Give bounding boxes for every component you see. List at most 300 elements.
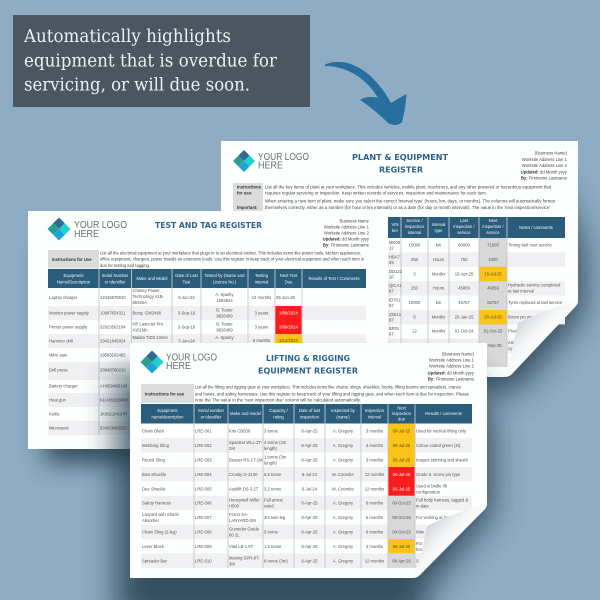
table: lifting register: 08-Jul-25 (393, 544, 411, 549)
table: test register: Microwave (49, 425, 70, 430)
table: plant register: 60000 (458, 243, 470, 248)
table: test register: A. Sparky (215, 335, 234, 340)
table: lifting register: Results / comments (425, 411, 462, 416)
table: lifting register: Used for vertical lifting only (416, 429, 467, 434)
table: test register: Make and Model (137, 276, 168, 281)
table: test register: Printer power supply (49, 325, 88, 330)
table: lifting register: 6 months (366, 501, 383, 506)
instructions: plant register: When entering a new item of plant, make sure you select the correct 'interval type' (hours, km, days, or months). The columns will automatically format (265, 199, 556, 204)
instructions: test register (48, 250, 364, 268)
table: test register: 3/12/2024 (279, 338, 298, 343)
table: test register: A. Sparky (215, 292, 234, 297)
table: lifting register: 08-Jul-25 (393, 429, 411, 434)
table: lifting register: Lever Block (142, 544, 165, 549)
table: plant register: DD123 (389, 269, 403, 274)
table: plant register: 67 (389, 303, 394, 308)
table: lifting register: (name) (336, 414, 350, 420)
table: plant register: Notes / comments (519, 225, 553, 230)
address block: lifting register: Worksite Address Line 1 (429, 358, 475, 363)
table: lifting register: A. Gregory (333, 501, 354, 506)
table: plant register: type (435, 228, 443, 233)
table: lifting register: 80 2L (229, 532, 240, 538)
table: lifting register: 8-Apr-25 (301, 501, 318, 506)
table: lifting register: LRE-009 (195, 544, 212, 549)
logo: lifting register (140, 350, 217, 374)
instructions: test register: Instructions for Use (52, 257, 92, 262)
table: lifting register: A. Gregory (333, 544, 354, 549)
table: lifting register: Beaver RS-1T-1M (229, 458, 263, 463)
instructions: plant register (233, 183, 556, 211)
table: lifting register: 8-Apr-25 (301, 429, 318, 434)
table: lifting register: Austlift DS-3.2T (229, 486, 259, 491)
table: test register (48, 269, 366, 435)
callout banner: servicing, or will due soon. (24, 76, 250, 96)
table: plant register: km (436, 300, 442, 305)
table: lifting register: Ferno SA- (229, 512, 249, 517)
table: lifting register: Capacity / (269, 408, 289, 413)
table: test register: 3 years (255, 311, 268, 316)
address block: test register: Updated: dd Month yyyy (323, 237, 370, 242)
table: lifting register: Chain Block (142, 429, 165, 434)
table: plant register: inspection / (453, 224, 475, 229)
table: lifting register: H500 (229, 504, 240, 509)
table: lifting register: 08-Oct-25 (392, 501, 411, 506)
table: plant register: Boom pin wear monitored (508, 315, 556, 320)
table: lifting register: Make and model (230, 411, 261, 416)
table: plant register: 750 (460, 257, 468, 262)
table: lifting register: Absorber (142, 518, 160, 523)
table: lifting register: Serial number (198, 408, 225, 413)
table: plant register: Press (508, 329, 519, 334)
panel: plant and equipment register (221, 141, 578, 377)
table: plant register: Months (432, 315, 445, 320)
logo: test register: HERE (74, 229, 99, 240)
table: lifting register: LRE-010 (195, 558, 212, 563)
table: lifting register: 8 tonne (3m) (264, 558, 288, 563)
logo: plant register (233, 150, 309, 172)
table: lifting register: Witn (416, 529, 425, 534)
table: lifting register: LRE-002 (195, 443, 212, 448)
table: test register: 93402M83320 (100, 425, 127, 430)
table: lifting register: 8-Apr-25 (301, 443, 318, 448)
table: lifting register: Webbing Sling (142, 443, 170, 448)
instructions: test register: office equipment, chargers, power boards an extension leads. Use this register to keep track of your electrical equipment and when each item is (100, 256, 364, 261)
table: lifting register: 8-Apr-25 (301, 458, 318, 463)
table: plant register: 12 (412, 329, 417, 334)
table: plant register: km (436, 243, 442, 248)
table: lifting register: LRE-006 (195, 501, 212, 506)
table: lifting register: Colour coded green (2t) (416, 443, 461, 448)
table: lifting register: 06-Jul-25 (393, 472, 411, 477)
table: lifting register: 2 tonne (2m (264, 440, 287, 445)
table: lifting register: 6.5 tonne (264, 472, 282, 477)
table: test register: B. Tester (216, 308, 233, 312)
table: plant register: service (486, 230, 500, 235)
table: test register: 6 months (253, 338, 270, 343)
table: lifting register: M. Coombe (332, 486, 354, 491)
table: lifting register: For b (416, 541, 426, 546)
table: plant register: Interval (432, 222, 445, 227)
panel: lifting and rigging register (130, 343, 487, 578)
table: lifting register: 6-Jul-24 (302, 472, 318, 477)
table: lifting register: 3M (229, 562, 235, 566)
table: lifting register: inspection (392, 411, 412, 416)
table: lifting register: hook (416, 547, 426, 552)
table: test register: Next Test (280, 273, 298, 278)
table: lifting register: 2M (229, 446, 235, 451)
table: plant register: Service / (406, 218, 423, 223)
table: test register: Battery charger (49, 384, 78, 389)
table: lifting register: 8-Apr-25 (301, 529, 318, 534)
panel: test and tag register (28, 211, 388, 449)
table: lifting register: Next (397, 406, 407, 410)
address block: plant register (521, 151, 568, 181)
table: plant register: 67 (389, 288, 394, 294)
table: plant register: ID701 (389, 298, 401, 302)
table: lifting register: 3 months (366, 443, 383, 448)
address block: lifting register: By: Firstname Lastname (428, 377, 475, 382)
instructions: lifting register: List all the lifting and rigging gear at your workplace. This includes items like chains, slings, shackles, hooks, lifting beams and spreaders, cranes (195, 385, 461, 390)
table: test register: 10987654321 (100, 311, 126, 316)
table: lifting register: A. Gregory (333, 529, 354, 534)
table: plant register: 01-Oct-25 (484, 329, 503, 334)
address block: test register: Business Name (340, 219, 370, 224)
table: lifting register: 08-Oct-25 (392, 515, 411, 520)
table: plant register: 45757 (458, 300, 470, 305)
table: plant register: Next (489, 218, 498, 223)
instructions: lifting register: note the The value in the 'next inspection due' column will be calculated automatically. (195, 398, 361, 403)
table: test register: 12 months (252, 295, 271, 300)
table: plant register: 6 (413, 315, 416, 320)
table: test register: 29451845024 (100, 339, 126, 344)
table: plant register: 12 (389, 246, 394, 250)
table: test register: Due (285, 280, 293, 284)
address block: lifting register: Worksite Address Line 2 (429, 364, 475, 369)
table: lifting register: Grade 6, screw pin type (416, 472, 461, 477)
table: test register: 32923502184 (100, 325, 126, 330)
table: test register: Monitor power supply (49, 311, 90, 316)
table: test register: Hammer drill (49, 339, 73, 344)
logo: lifting register: YOUR LOGO (166, 353, 217, 364)
table: plant register: 67 (389, 332, 394, 336)
table: lifting register: Gunnebo Grade (229, 526, 260, 532)
table: lifting register: Inspect stitching and sheath (416, 458, 469, 463)
table: plant register: 87 (389, 318, 394, 322)
table: lifting register: LRE-003 (195, 458, 212, 463)
title: test register: TEST AND TAG REGISTER (155, 220, 263, 230)
table: plant register: 3 (413, 272, 416, 277)
table: lifting register: LRE-001 (195, 429, 212, 434)
table: test register: Date of Last (175, 273, 199, 278)
logo: plant register: YOUR LOGO (258, 152, 309, 163)
instructions: plant register: for use: (237, 191, 252, 196)
table: test register: 4101fdn (132, 328, 148, 332)
table: test register: 3 years (255, 325, 268, 330)
table: plant register: Annu (508, 340, 518, 345)
title: lifting register: LIFTING & RIGGING (266, 353, 350, 363)
table: test register: Testing (255, 273, 269, 278)
table: lifting register: 8-Apr-25 (301, 544, 318, 549)
table: lifting register: 12 months (365, 472, 384, 477)
table: lifting register: LRE-007 (195, 515, 212, 520)
table: lifting register: Safety Harness (142, 501, 171, 506)
callout banner (13, 15, 310, 107)
table: lifting register: Chain Sling (2-leg) (142, 529, 177, 534)
title: plant register (352, 152, 448, 175)
table: plant register: Hours (433, 286, 444, 291)
table: lifting register: interval (368, 414, 381, 420)
table: lifting register: Fall arrest (264, 498, 283, 503)
table: test register: Mitre saw (49, 353, 68, 358)
address block: plant register: Worksite Address Line 2 (522, 163, 568, 168)
table: test register: 28848760210 (100, 368, 126, 373)
table: lifting register: A. Gregory (333, 558, 354, 563)
callout banner: Automatically highlights (23, 27, 231, 47)
address block: test register: Worksite Address Line 2 (324, 231, 370, 236)
table: lifting register: A. Gregory (333, 429, 354, 434)
instructions: plant register: requires regular servicing or inspection. Keep written records of services, inspection and maintenance for each item. (265, 191, 487, 196)
title: lifting register: EQUIPMENT REGISTER (258, 366, 359, 376)
table: lifting register: 08-Oct-25 (392, 529, 411, 534)
table: plant register: 29 (389, 260, 394, 265)
table: lifting register: Date of last (299, 408, 321, 413)
table: plant register: 15000 (409, 243, 421, 248)
address block: plant register: By: Firstname Lastname (521, 176, 568, 181)
table: lifting register: Spreader Bar (142, 558, 168, 563)
table: lifting register: Used in bridle lift (416, 484, 448, 488)
table: lifting register: 3 tonne (264, 429, 279, 434)
address block: plant register: Worksite Address Line 1 (522, 157, 568, 162)
table: lifting register: or identifier (201, 414, 222, 420)
table: plant register: 1000 (488, 257, 498, 262)
table: lifting register: 8-Apr-25 (301, 515, 318, 520)
table: test register: 5-Jun-24 (178, 295, 195, 300)
table: test register: Makita TID3 13mm (132, 335, 168, 340)
table: plant register: 45809 (458, 286, 470, 291)
table: test register: Equipment (63, 273, 84, 278)
table: plant register: 3-Sep-25 (484, 343, 502, 348)
table: lifting register: rated (264, 504, 274, 509)
table: plant register: Months (432, 272, 445, 277)
table: lifting register: in-date (416, 504, 429, 509)
logo: lifting register: HERE (166, 361, 191, 372)
table: lifting register: For working at heights (416, 515, 457, 520)
table: test register: or Identifier (105, 280, 126, 284)
table: lifting register: SpanSet WLL-2T- (229, 440, 263, 445)
table: lifting register: Crosby G-2130 (229, 472, 258, 477)
table: test register: 3/09/2024 (279, 311, 298, 316)
table: lifting register: 5 tonne (264, 529, 279, 534)
table: lifting register: A. Gregory (333, 443, 354, 448)
table: plant register: interval (408, 230, 421, 235)
table: lifting register: 3 months (366, 544, 383, 549)
table: lifting register: Equipment (157, 408, 178, 413)
table: test register: Laptop charger (49, 295, 78, 300)
table: lifting register: name/description (152, 414, 184, 420)
instructions: test register: List all the electrical equipment at your workplace that plugs in to an electrical socket. This includes items like power tools, kitchen appliances, (100, 250, 361, 255)
table: test register: Licence No.) (213, 280, 237, 284)
table: plant register: Hydraulic service completed (508, 283, 561, 288)
table: plant register: 01-Oct-24 (455, 329, 474, 334)
table: plant register: inspection (405, 224, 425, 229)
table: lifting register: Dee Shackle (142, 486, 166, 491)
table: plant register: HBA7 (389, 254, 401, 260)
table: test register: HP LaserJet Pro (132, 322, 164, 326)
table: lifting register: rating (273, 414, 284, 420)
table: test register: B. Tester (216, 322, 233, 326)
table: plant register: cycle (508, 346, 518, 351)
instructions: lifting register (141, 384, 470, 403)
instructions: plant register: Important: (237, 205, 258, 210)
table: plant register: 250 (411, 286, 419, 291)
table: lifting register: inspection (300, 414, 320, 420)
table: test register: 9826489 (216, 328, 233, 332)
table: lifting register: length) (264, 446, 277, 451)
table: test register: Kettle (49, 411, 60, 416)
instructions: plant register: List all the key items of plant at your workplace. This includes vehicles, mobile plant, machinery, and any other powered or hazardous equipment that (265, 185, 552, 190)
table: test register: 85482A (132, 300, 147, 305)
table: plant register: Hours (433, 257, 444, 262)
table: test register: JK8921041HR (100, 411, 127, 416)
table: lifting register (141, 404, 472, 568)
table: lifting register: configuration (416, 490, 441, 494)
table: lifting register: 2m twin leg (264, 515, 286, 520)
table: test register: Name/Description (57, 280, 91, 284)
table: plant register: 250 (411, 257, 419, 262)
table: lifting register: A. Gregory (333, 458, 354, 463)
table: test register: Test (183, 280, 191, 284)
table: plant register: VIN (392, 222, 398, 227)
table: test register: Technology A1B- (132, 294, 165, 299)
table: test register: Benq; GW2480 (132, 311, 162, 316)
address block: lifting register: Updated: dd Month yyyy (428, 370, 475, 375)
table: test register: 9826489 (216, 314, 233, 318)
address block: plant register: (Business Name) (535, 151, 568, 156)
table: plant register: MK08 (389, 240, 401, 245)
table: lifting register: LRE-005 (195, 486, 212, 491)
logo: test register: YOUR LOGO (74, 220, 127, 231)
table: plant register: 46059 (487, 286, 499, 291)
table: test register: Chasey Power (132, 288, 160, 293)
table: lifting register: M. Coombe (332, 472, 354, 477)
table: plant register: inspection / (482, 224, 504, 229)
table: plant register: JSK11 (389, 312, 402, 317)
table: lifting register: 1 tonne (3m (264, 455, 287, 460)
table: lifting register: Self (416, 558, 424, 563)
table: plant register: QICA1 (389, 283, 402, 288)
table: test register: Serial Number (102, 273, 129, 278)
logo: plant register: HERE (258, 160, 283, 172)
title: lifting register (258, 353, 359, 376)
table: test register: 19583102482 (100, 353, 126, 358)
table: test register: 3-Sep-19 (178, 325, 196, 330)
table: lifting register: length) (264, 461, 277, 466)
table: plant register: Timing belt next service (508, 243, 553, 248)
table: plant register: 15-Jul-25 (484, 272, 502, 277)
table: lifting register: 3 months (366, 429, 383, 434)
table: lifting register: 12 months (365, 558, 384, 563)
callout banner: equipment that is overdue for (24, 52, 278, 72)
table: test register: Heat gun (49, 398, 67, 403)
table: lifting register: 06-Jul-25 (393, 486, 411, 491)
table: test register: 3-Sep-19 (178, 311, 196, 316)
table: plant register: Last (460, 218, 469, 223)
table: lifting register: Inspection (365, 408, 385, 413)
table: test register: Drill press (49, 368, 68, 373)
table: lifting register: 6 months (366, 529, 383, 534)
table: plant register: at last interval (508, 289, 534, 294)
table: plant register: 1F (389, 274, 394, 280)
address block: lifting register (428, 352, 475, 382)
table: lifting register: Bow Shackle (142, 472, 167, 477)
table: plant register: 20-Jan-25 (455, 315, 474, 320)
table: lifting register: 6-Jul-24 (302, 486, 318, 491)
table: lifting register: Vital LB-1.5T (229, 544, 254, 549)
table: lifting register: Round Sling (142, 458, 165, 463)
title: plant register: PLANT & EQUIPMENT (352, 152, 448, 162)
title: plant register: REGISTER (379, 165, 424, 175)
table: plant register: ber (392, 228, 399, 233)
table: test register: 12345678910 (100, 295, 126, 300)
address block: plant register: Updated: dd Month yyyy (521, 169, 568, 174)
instructions: plant register: themselves correctly, either as a number (for hour or km intervals) or as a date (for day or month intervals). The value in the 'next inspection/service' (265, 205, 550, 210)
address block: lifting register: (Business Name) (442, 352, 475, 357)
table: lifting register: 12 months (365, 486, 384, 491)
table: test register: 1569824 (216, 298, 233, 303)
address block: test register: By: Firstname Lastname (323, 243, 370, 248)
table: plant register: 71000 (487, 243, 499, 248)
arrow (325, 62, 406, 125)
table: test register: 05-Jun-25 (276, 295, 296, 300)
table: lifting register: due (398, 416, 406, 422)
page curl: lifting register (413, 504, 487, 578)
table: plant register: BP01 (389, 326, 400, 331)
table: lifting register: Inspected by (331, 408, 356, 413)
table: plant register: 10000 (409, 300, 421, 305)
table: test register: 7-Jun-24 (178, 339, 195, 344)
table: test register: Results of Test / Comments (308, 276, 360, 281)
table: lifting register: LRE-004 (195, 472, 212, 477)
table: lifting register: 08-Jul-25 (393, 458, 411, 463)
table: test register: KLIA09103848 (100, 398, 128, 403)
page curl: plant register (505, 301, 578, 377)
table: lifting register: 3 months (366, 458, 383, 463)
table: lifting register: 1.5 tonne (264, 544, 282, 549)
table: lifting register: Lanyard with Shock (142, 512, 179, 517)
table: lifting register: 6 months (366, 515, 383, 520)
table: lifting register: 8-Apr-25 (301, 558, 318, 563)
table: lifting register: LRE-008 (195, 529, 212, 534)
table: lifting register: Maxing SPR-8T- (229, 556, 260, 560)
instructions: test register: due for testing and tagging. (100, 263, 150, 268)
table: plant register: service (457, 230, 471, 235)
table: lifting register: Kito CB030 (229, 429, 251, 434)
table: plant register: 20-Jul-25 (484, 315, 502, 320)
table: plant register: Months (432, 329, 445, 334)
table: plant register: 15-Apr-25 (455, 272, 474, 277)
table: lifting register: 08-Apr-26 (392, 558, 411, 563)
table: test register: Tested by (Name and (205, 273, 245, 278)
table: lifting register: 08-Jul-25 (393, 443, 411, 448)
table: plant register: 55757 (487, 300, 499, 305)
logo: test register (48, 218, 127, 240)
address block: test register: Worksite Address Line 1 (324, 225, 370, 230)
address block: test register (323, 219, 370, 248)
table: test register: 3/09/2024 (279, 325, 298, 330)
instructions: lifting register: Instructions for use (145, 392, 185, 397)
table: test register: AH95948B190 (100, 384, 128, 389)
instructions: plant register: Instructions (237, 185, 262, 190)
